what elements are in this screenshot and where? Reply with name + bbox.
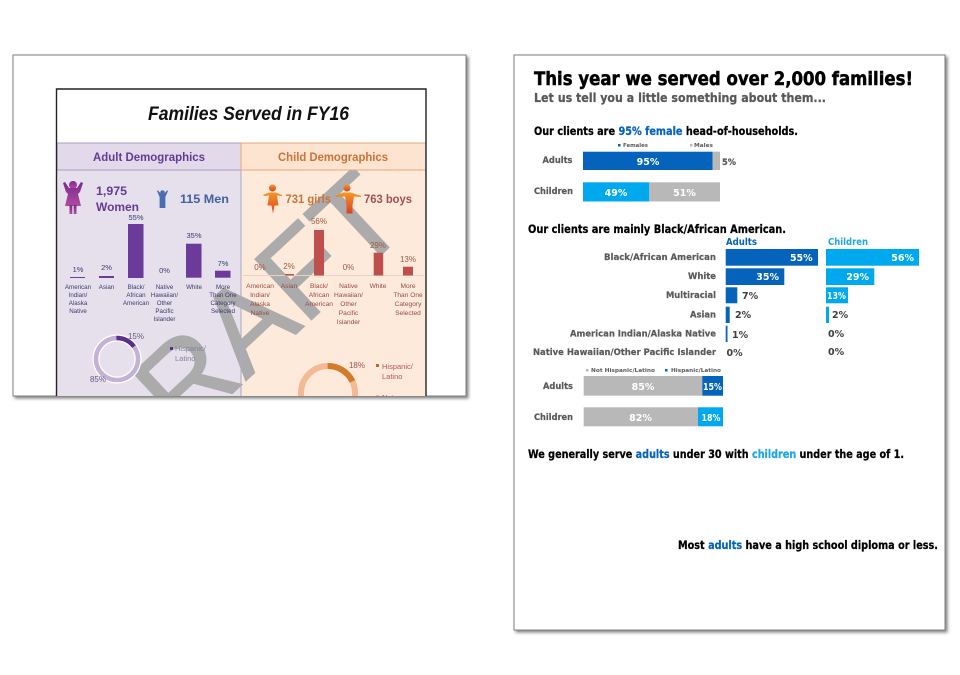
- stat: 731 girls: 731 girls: [286, 192, 331, 206]
- bar chart: adult race: Native: [156, 284, 174, 291]
- divider and frame: [56, 89, 426, 400]
- icon: woman: [63, 181, 83, 214]
- bar chart: children race: 56%: [891, 253, 914, 264]
- heading: Adult Demographics: [57, 143, 241, 170]
- bar chart: child race: Asian: [281, 283, 298, 290]
- bar chart: child race: White: [370, 283, 387, 290]
- legend: females and males: Males: [694, 143, 714, 149]
- bar chart: gender: Children: [534, 187, 573, 197]
- bar chart: child race: African: [309, 292, 330, 299]
- bar chart: children race: 2%: [832, 310, 849, 321]
- bar chart: child race: Selected: [395, 310, 421, 317]
- bar chart: adult race: Asian: [99, 284, 115, 291]
- bar chart: adult race: Islander: [153, 316, 176, 323]
- donut chart: adult ethnicity: 15%: [128, 332, 144, 341]
- bar chart: child race: [243, 217, 424, 326]
- bar chart: adult race: Hawaiian/: [151, 292, 178, 299]
- donut chart: child ethnicity: Not: [382, 393, 395, 402]
- icon: girl: [263, 184, 282, 214]
- row labels: race categories: Asian: [690, 310, 716, 320]
- bar chart: adult race: More: [216, 284, 231, 291]
- bar chart: adult race: [65, 213, 237, 323]
- bar chart: ethnicity: 18%: [702, 413, 721, 424]
- bar chart: child race: Pacific: [339, 310, 359, 317]
- bar chart: adult race: Selected: [211, 308, 236, 315]
- title: Families Served in FY16: Families Served in FY16: [148, 104, 349, 125]
- bar chart: adult race: Pacific: [155, 308, 174, 315]
- bar chart: adults race: 35%: [756, 272, 779, 283]
- bar chart: child race: Black/: [310, 283, 328, 290]
- legend: ethnicity: Hispanic/Latino: [671, 368, 721, 374]
- bar chart: adult race: Black/: [128, 284, 145, 291]
- bar chart: adult race: 2%: [101, 263, 112, 272]
- bar chart: ethnicity: Children: [534, 413, 573, 423]
- bar chart: adults race: Adults: [726, 237, 757, 248]
- stat: 1,975 Women: [96, 186, 138, 211]
- row labels: race categories: Multiracial: [666, 291, 716, 301]
- bar chart: children race: 13%: [827, 291, 846, 302]
- bar chart: children race: Children: [828, 237, 868, 248]
- stat: 1,975 Women: Women: [96, 200, 139, 214]
- heading: Child Demographics: [241, 143, 426, 170]
- panel: child background: [242, 170, 426, 396]
- donut chart: child ethnicity: 18%: [349, 361, 365, 370]
- row labels: race categories: American Indian/Alaska Native: [570, 330, 716, 340]
- bar chart: child race: Native: [251, 310, 270, 317]
- stat: 1,975 Women: 1,975: [96, 184, 127, 198]
- stat: 115 Men: 115 Men: [180, 192, 229, 206]
- bar chart: child race: 0%: [343, 263, 354, 272]
- bar chart: adult race: Native: [69, 308, 87, 315]
- donut chart: child ethnicity: [298, 362, 413, 396]
- bar chart: ethnicity: 15%: [703, 382, 722, 393]
- title: This year we served over 2,000 families!: This year we served over 2,000 families!: [534, 68, 913, 90]
- bar chart: adult race: American: [123, 300, 150, 307]
- row labels: race categories: Native Hawaiian/Other Pacific Islander: [533, 348, 717, 358]
- bar chart: adults race: 55%: [790, 253, 813, 264]
- bar chart: children race: 0%: [828, 347, 845, 358]
- donut chart: adult ethnicity: 85%: [90, 375, 106, 384]
- bar chart: adults race: [726, 237, 818, 359]
- bar chart: child race: American: [246, 283, 274, 290]
- heading: 95% female: Our clients are 95% female head-of-households.: [534, 124, 798, 138]
- bar chart: ethnicity: Adults: [543, 382, 573, 392]
- bar chart: adult race: 35%: [186, 231, 202, 240]
- bar chart: adult race: 1%: [73, 265, 84, 274]
- bar chart: adult race: African: [126, 292, 146, 299]
- bar chart: child race: Native: [339, 283, 358, 290]
- bar chart: child race: More: [400, 283, 416, 290]
- bar chart: adults race: 0%: [726, 348, 743, 359]
- bar chart: gender: Adults: [542, 156, 572, 166]
- legend: females and males: [618, 143, 714, 149]
- bar chart: child race: 29%: [370, 241, 386, 250]
- bar chart: adult race: Other: [157, 300, 172, 307]
- legend: ethnicity: [586, 368, 721, 374]
- donut chart: adult ethnicity: [90, 332, 207, 384]
- donut chart: child ethnicity: Hispanic/: [382, 362, 414, 371]
- bar chart: child race: 2%: [283, 262, 295, 271]
- bar chart: child race: Other: [340, 301, 358, 308]
- bar chart: children race: 0%: [828, 329, 845, 340]
- heading: mainly Black/African American: Our clients are mainly Black/African American.: [528, 222, 786, 236]
- heading: adults under 30: We generally serve adults under 30 with children under the age of 1.: [528, 447, 904, 461]
- panel: left slide, Families Served in FY16: [12, 54, 471, 401]
- row labels: race categories: White: [688, 272, 716, 282]
- bar chart: adults race: 7%: [742, 291, 759, 302]
- bar chart: adult race: Alaska: [69, 300, 88, 307]
- bar chart: gender: 49%: [605, 188, 628, 199]
- bar chart: adults race: 2%: [735, 310, 752, 321]
- bar chart: gender: [534, 152, 736, 202]
- bar chart: adult race: Indian/: [69, 292, 88, 299]
- bar chart: adult race: 55%: [128, 213, 144, 222]
- bar chart: ethnicity: 82%: [629, 413, 652, 424]
- bar chart: adult race: Category: [210, 300, 236, 307]
- bar chart: adult race: American: [65, 284, 92, 291]
- bar chart: gender: 51%: [673, 188, 696, 199]
- bar chart: child race: 56%: [311, 217, 327, 226]
- bar chart: gender: 5%: [722, 158, 736, 168]
- legend: ethnicity: Not Hispanic/Latino: [591, 368, 655, 374]
- subtitle: Let us tell you a little something about them...: [534, 91, 826, 105]
- bar chart: adults race: 1%: [732, 330, 749, 341]
- donut chart: child ethnicity: Latino: [382, 372, 402, 381]
- icon: boy: [335, 184, 361, 214]
- heading: Adult Demographics: Adult Demographics: [93, 150, 205, 164]
- bar chart: child race: Islander: [337, 319, 361, 326]
- donut chart: adult ethnicity: Hispanic/: [175, 344, 207, 353]
- heading: Child Demographics: Child Demographics: [278, 150, 388, 164]
- bar chart: child race: Indian/: [250, 292, 270, 299]
- bar chart: child race: Hawaiian/: [334, 292, 363, 299]
- legend: females and males: Females: [623, 143, 649, 149]
- bar chart: child race: American: [305, 301, 333, 308]
- bar chart: gender: 95%: [637, 157, 660, 168]
- bar chart: adult race: Than One: [209, 292, 237, 299]
- bar chart: adult race: 7%: [218, 259, 229, 268]
- bar chart: ethnicity: [534, 376, 723, 426]
- bar chart: children race: [826, 237, 919, 358]
- bar chart: adult race: 0%: [159, 266, 170, 275]
- bar chart: child race: 0%: [254, 263, 266, 272]
- bar chart: adult race: White: [186, 284, 202, 291]
- bar chart: ethnicity: 85%: [632, 382, 655, 393]
- bar chart: child race: Category: [395, 301, 422, 308]
- bar chart: child race: Alaska: [250, 301, 270, 308]
- panel: right slide, This year we served: [514, 55, 945, 630]
- donut chart: adult ethnicity: Latino: [175, 354, 195, 363]
- bar chart: children race: 29%: [846, 272, 869, 283]
- watermark: DRAFT: DRAFT: [45, 147, 429, 518]
- bar chart: child race: 13%: [400, 255, 416, 264]
- panel: adult background: [57, 170, 240, 396]
- bar chart: child race: Than One: [393, 292, 423, 299]
- stat: 763 boys: 763 boys: [364, 192, 412, 206]
- row labels: race categories: [533, 253, 717, 358]
- icon: man: [157, 190, 168, 208]
- row labels: race categories: Black/African American: [604, 253, 716, 263]
